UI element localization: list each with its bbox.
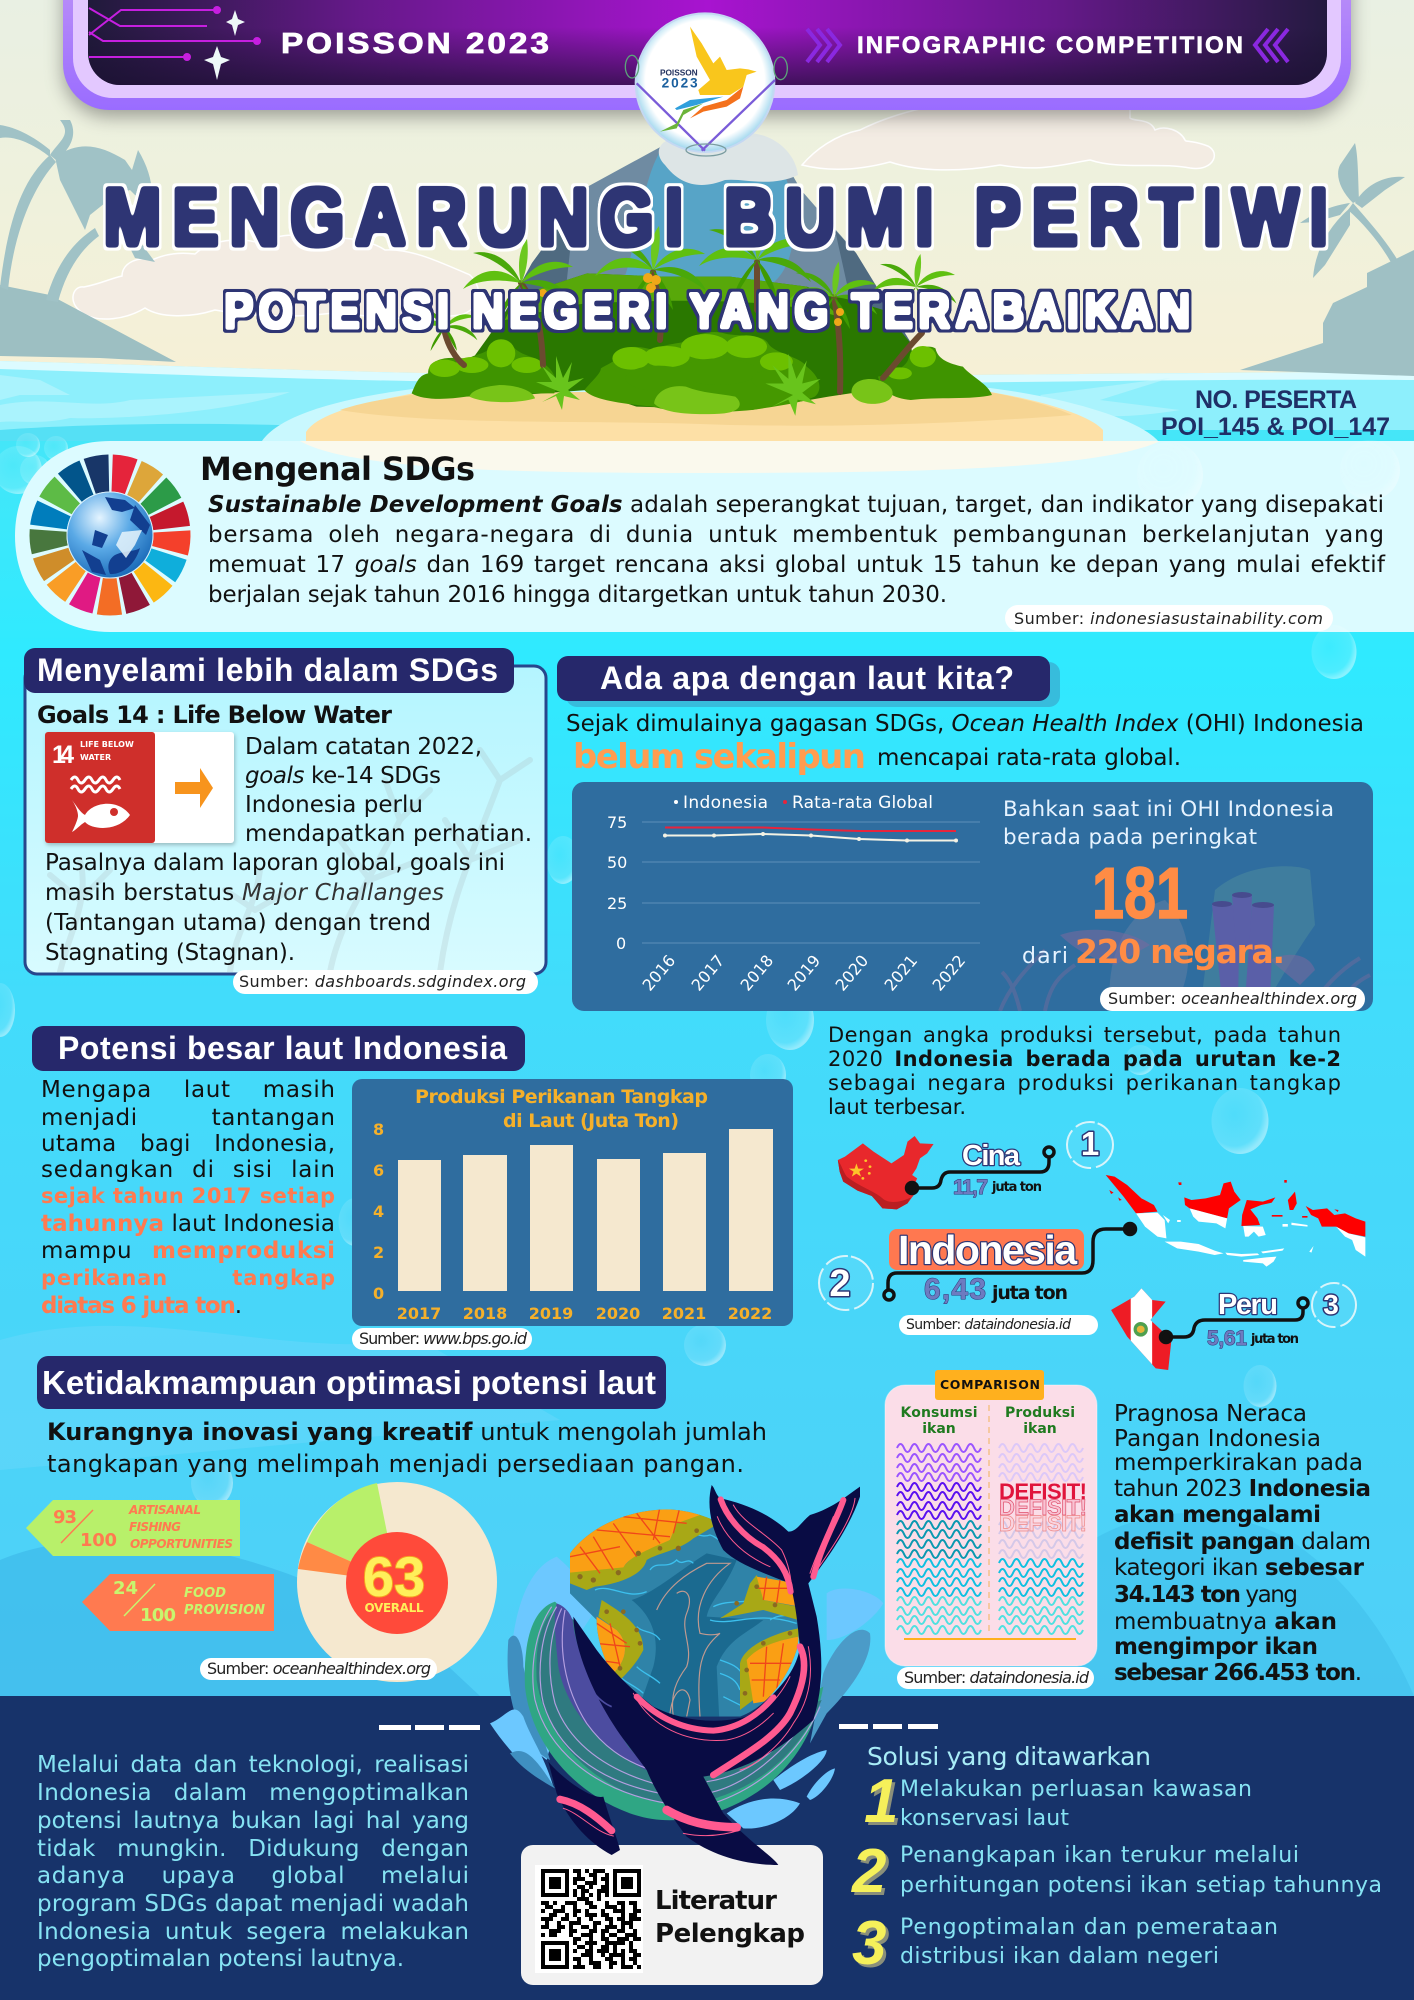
text block: intro paragraph: berjalan sejak tahun 2016 hingga ditargetkan untuk tahun 2030. — [208, 582, 947, 608]
text block: food balance: membuatnya akan — [1114, 1609, 1337, 1635]
text block: footer left: potensi lautnya bukan lagi hal yang — [37, 1808, 469, 1834]
text block: Pasalnya dalam laporan global, goals ini — [45, 850, 505, 876]
whale body — [548, 1485, 860, 1865]
solution 2 — [851, 1837, 1382, 1906]
rank badge 1 — [1067, 1122, 1113, 1168]
chevrons right — [1255, 29, 1288, 62]
sparkle icons — [204, 10, 245, 80]
participant number: POI_145 & POI_147 — [1161, 413, 1390, 441]
legend: Indonesia — [683, 793, 768, 813]
connector — [1160, 1298, 1308, 1342]
line chart: 2016 — [639, 951, 679, 995]
text block: utama bagi Indonesia, — [41, 1131, 335, 1157]
icon: SDG 14 tile — [45, 732, 234, 843]
text block: rank intro: laut terbesar. — [828, 1095, 966, 1119]
icon: Peru map — [1111, 1288, 1172, 1370]
coconuts — [539, 273, 844, 326]
production waves — [999, 1444, 1083, 1634]
icon: globe — [67, 492, 153, 578]
center bush — [584, 332, 819, 412]
tag: artisanal fishing: 100 — [80, 1530, 117, 1551]
source pill: Sumber: indonesiasustainability.com — [1014, 609, 1323, 628]
source pill: Sumber: www.bps.go.id — [359, 1329, 528, 1348]
coral decoration — [1000, 866, 1370, 1011]
source pill — [899, 1315, 1098, 1335]
bubbles left of intro — [0, 433, 68, 494]
text block: perikanan tangkap — [41, 1266, 335, 1290]
text block: food balance: memperkirakan pada — [1114, 1450, 1363, 1476]
panel: Menyelami lebih dalam SDGs — [24, 648, 546, 994]
source pill — [1005, 605, 1333, 631]
label pill: Indonesia — [898, 1227, 1078, 1273]
text block: food balance: mengimpor ikan — [1114, 1634, 1318, 1660]
text block: footer left: adanya upaya global melalui — [37, 1863, 469, 1889]
label: Cina — [962, 1140, 1021, 1172]
bar chart: 2022 — [728, 1304, 772, 1323]
text block: rank intro — [828, 1023, 1341, 1119]
circuit lines — [89, 6, 261, 61]
icon: SDG 14 tile: 14 — [52, 741, 74, 769]
bar chart — [352, 1079, 793, 1326]
chart: OHI score donut: OVERALL — [364, 1601, 424, 1615]
text block: mendapatkan perhatian. — [245, 821, 532, 847]
decorative dashes left and right — [379, 1724, 938, 1730]
solution 1: konservasi laut — [900, 1806, 1069, 1831]
rank callout: dari — [1022, 944, 1068, 969]
text block: footer left: Indonesia dalam mengoptimalkan — [37, 1780, 469, 1806]
deficit label: DEFISIT! — [999, 1511, 1087, 1536]
text block: food balance: akan mengalami — [1114, 1502, 1321, 1528]
panel: Ketidakmampuan optimasi potensi laut — [26, 1356, 767, 1682]
value: 11,7 — [953, 1176, 988, 1199]
heading: Mengenal SDGs: Mengenal SDGs — [200, 450, 475, 488]
water splashes — [490, 1557, 883, 1829]
foliage: bushes in island coordinates — [412, 273, 992, 414]
grass tufts — [536, 354, 821, 416]
bar chart: 2017 — [397, 1304, 441, 1323]
text block: intro paragraph — [208, 492, 1386, 608]
line chart: 75 — [607, 813, 627, 832]
rank callout: 220 negara. — [1075, 932, 1285, 971]
label — [655, 1886, 805, 1949]
intro panel: Mengenal SDGs — [15, 440, 1414, 632]
text block: (Tantangan utama) dengan trend — [45, 910, 431, 936]
text block: belum sekalipun — [573, 737, 866, 777]
text block: Kurangnya inovasi yang kreatif untuk mengolah jumlah — [47, 1418, 767, 1446]
heading pill: Ada apa dengan laut kita? — [600, 660, 1014, 696]
whale belly — [525, 1602, 823, 1820]
tag: food provision: 100 — [140, 1605, 176, 1626]
value: juta ton — [991, 1180, 1042, 1195]
text block: mampu memproduksi — [41, 1238, 335, 1264]
text block: rank intro: sebagai negara produksi perikanan tangkap — [828, 1071, 1341, 1095]
logo: Poisson 2023: 2023 — [662, 75, 698, 90]
panel: Potensi besar laut Indonesia — [32, 1026, 793, 1350]
icon: China map — [838, 1136, 934, 1209]
comparison card: COMPARISON — [940, 1377, 1040, 1392]
value — [1207, 1327, 1299, 1350]
line chart: 25 — [607, 894, 627, 913]
background: left mountain and palms — [0, 120, 176, 362]
column headers: Produksi — [1005, 1405, 1075, 1421]
bar chart: 2020 — [596, 1304, 640, 1323]
background: bubbles and sea shapes — [0, 625, 1414, 1696]
line chart: 2022 — [929, 951, 969, 995]
text block: mencapai rata-rata global. — [877, 745, 1181, 771]
bird — [690, 27, 757, 95]
header banner — [63, 0, 1351, 110]
source pill: Sumber: dataindonesia.id — [904, 1668, 1090, 1687]
text block: Stagnating (Stagnan). — [45, 940, 295, 966]
line chart: 2018 — [737, 951, 777, 995]
text block: goals ke-14 SDGs — [245, 763, 441, 789]
text block: tahunnya laut Indonesia — [41, 1211, 335, 1237]
subtitle: POTENSI NEGERI YANG TERABAIKAN — [224, 282, 1190, 339]
line chart: 2020 — [832, 951, 872, 995]
bar chart: di Laut (Juta Ton) — [503, 1110, 679, 1132]
QR code — [535, 1865, 643, 1973]
background: right mountain and palm — [1240, 143, 1414, 376]
deficit label — [999, 1479, 1087, 1536]
bubbles on intro — [1137, 440, 1400, 508]
coral decoration — [50, 750, 530, 972]
sand rings — [262, 388, 1158, 441]
text block — [47, 1418, 767, 1478]
line chart: 2017 — [688, 951, 728, 995]
palm crowns — [430, 226, 956, 351]
text block: footer left — [37, 1752, 469, 1972]
deficit label: DEFISIT! — [999, 1479, 1087, 1504]
text block: sedangkan di sisi lain — [41, 1157, 335, 1183]
text block: footer left: Indonesia untuk segera melakukan — [37, 1919, 469, 1945]
text block: food balance: Pangan Indonesia — [1114, 1426, 1321, 1452]
rank badge 1: 1 — [1081, 1125, 1099, 1162]
heading pill: Menyelami lebih dalam SDGs — [37, 652, 498, 688]
icon: Indonesia map — [1106, 1175, 1365, 1267]
text block: Dalam catatan 2022, — [245, 734, 482, 760]
whale stripes — [560, 1498, 855, 1836]
text block: Sejak dimulainya gagasan SDGs, Ocean Health Index (OHI) Indonesia — [566, 711, 1364, 737]
source pill: Sumber: oceanhealthindex.org — [1108, 989, 1357, 1008]
legend: Rata-rata Global — [792, 793, 933, 813]
subheading: Goals 14 : Life Below Water — [37, 701, 392, 729]
text block: intro paragraph: memuat 17 goals dan 169 target rencana aksi global untuk 15 tahun ke depan yang mulai efektif — [208, 552, 1386, 578]
rank badge 3 — [1312, 1283, 1356, 1327]
column headers: Konsumsi — [900, 1405, 978, 1421]
bar chart: 8 — [373, 1120, 384, 1139]
value — [924, 1273, 1068, 1306]
bar chart: 2018 — [463, 1304, 507, 1323]
source pill: Sumber: dataindonesia.id — [906, 1317, 1071, 1333]
rank badge 2 — [819, 1256, 873, 1310]
bar chart: 0 — [373, 1284, 384, 1303]
ranking: Indonesia — [819, 1175, 1365, 1335]
bar chart: 6 — [373, 1161, 384, 1180]
line chart: 50 — [607, 853, 627, 872]
text block: Indonesia perlu — [245, 792, 423, 818]
text block: food balance: kategori ikan sebesar — [1114, 1555, 1365, 1581]
rank badge 3: 3 — [1323, 1289, 1339, 1320]
QR card: Literatur Pelengkap — [521, 1845, 823, 1985]
text block: menjadi tantangan — [41, 1105, 335, 1131]
chart panel — [572, 782, 1373, 1011]
legend — [674, 793, 933, 813]
text block: intro paragraph: bersama oleh negara-negara di dunia untuk membentuk pembangunan berkelanjutan yang — [208, 522, 1384, 548]
tag: food provision — [82, 1574, 274, 1631]
small bushes — [469, 379, 893, 414]
line chart: 0 — [616, 934, 626, 953]
heading: Solusi yang ditawarkan — [867, 1742, 1151, 1771]
text block — [41, 1077, 335, 1319]
text block: footer left: program SDGs dapat menjadi wadah — [37, 1891, 469, 1917]
text block: food balance: sebesar 266.453 ton. — [1114, 1660, 1362, 1686]
text block: rank intro: Dengan angka produksi tersebut, pada tahun — [828, 1023, 1341, 1047]
text block: intro paragraph: Sustainable Development Goals adalah seperangkat tujuan, target, dan indikator yang disepakati — [208, 492, 1384, 518]
solution 2: perhitungan potensi ikan setiap tahunnya — [900, 1873, 1382, 1898]
solution 3: Pengoptimalan dan pemerataan — [900, 1915, 1278, 1940]
ribbons — [625, 55, 787, 156]
text block: food balance: defisit pangan dalam — [1114, 1529, 1371, 1555]
heading pill: Ketidakmampuan optimasi potensi laut — [42, 1364, 656, 1401]
solution 1 — [864, 1767, 1252, 1836]
illustration: whale and globe — [490, 1485, 883, 1865]
footer band — [0, 1696, 1414, 2000]
solution 3 — [852, 1909, 1278, 1978]
participant number — [1161, 386, 1390, 441]
rank badge 2: 2 — [829, 1263, 851, 1305]
bar chart: 4 — [373, 1202, 384, 1221]
heading pill — [37, 1356, 666, 1409]
solution 2: 2 — [851, 1837, 886, 1906]
connector — [906, 1147, 1054, 1194]
text block: footer left: tidak mungkin. Didukung dengan — [37, 1836, 469, 1862]
rank callout: berada pada peringkat — [1003, 825, 1257, 850]
ranking: Cina — [838, 1122, 1113, 1209]
tag: artisanal fishing — [26, 1500, 240, 1556]
deficit label: DEFISIT! — [999, 1495, 1087, 1520]
participant number: NO. PESERTA — [1195, 386, 1357, 414]
text block: footer left: Melalui data dan teknologi, realisasi — [37, 1752, 469, 1778]
text block: tangkapan yang melimpah menjadi persediaan pangan. — [47, 1450, 744, 1478]
column headers: ikan — [1023, 1421, 1057, 1437]
left bush — [412, 339, 556, 399]
tag: food provision: FOOD — [184, 1586, 226, 1601]
label: Peru — [1218, 1289, 1278, 1321]
comparison card — [885, 1370, 1097, 1666]
bar chart: 2 — [373, 1243, 384, 1262]
icon: SDG 14 tile: WATER — [80, 753, 111, 762]
value: juta ton — [991, 1282, 1068, 1304]
tag: food provision: PROVISION — [184, 1603, 265, 1618]
solution 1: Melakukan perluasan kawasan — [900, 1777, 1252, 1802]
heading pill — [557, 656, 1060, 707]
right bush — [878, 347, 992, 400]
value: juta ton — [1250, 1332, 1299, 1347]
solution 3: 3 — [852, 1909, 886, 1978]
logo wordmark: POISSON — [660, 67, 698, 77]
source pill: Sumber: dashboards.sdgindex.org — [239, 972, 526, 991]
text block: Mengapa laut masih — [41, 1077, 335, 1103]
solution 3: distribusi ikan dalam negeri — [900, 1944, 1219, 1969]
title: MENGARUNGI BUMI PERTIWI — [103, 172, 1329, 263]
chart: OHI score donut: 63 — [363, 1545, 425, 1608]
panel: Ada apa dengan laut kita — [557, 656, 1373, 1011]
solution 2: Penangkapan ikan terukur melalui — [900, 1843, 1299, 1868]
tag: artisanal fishing: FISHING — [129, 1520, 181, 1534]
consumption waves — [897, 1444, 981, 1634]
connector — [884, 1224, 1136, 1300]
globe — [570, 1509, 799, 1717]
tag: food provision: 24 — [113, 1578, 138, 1599]
solution 1: 1 — [864, 1767, 898, 1836]
banner label left: POISSON 2023 — [281, 27, 549, 59]
source pill: Sumber: oceanhealthindex.org — [207, 1659, 431, 1678]
text block — [566, 711, 1364, 777]
background: clouds — [73, 100, 1214, 319]
line chart: 2019 — [784, 951, 824, 995]
palm trunks — [445, 262, 922, 392]
banner label right: INFOGRAPHIC COMPETITION — [857, 32, 1243, 59]
ranking: Peru — [1106, 1283, 1356, 1373]
text block: diatas 6 juta ton. — [41, 1293, 242, 1319]
text block: sejak tahun 2017 setiap — [41, 1184, 335, 1208]
value — [953, 1176, 1042, 1199]
label: Pelengkap — [655, 1919, 805, 1949]
logo: Poisson 2023 — [625, 13, 787, 156]
icon: SDG 14 tile: LIFE BELOW — [80, 740, 134, 749]
bar chart: Produksi Perikanan Tangkap — [415, 1086, 708, 1108]
text block — [45, 734, 532, 966]
dark foliage — [469, 273, 916, 410]
text block: footer left: pengoptimalan potensi lautnya. — [37, 1946, 404, 1972]
rank callout: 181 — [1092, 853, 1188, 933]
chart: OHI score donut — [297, 1482, 497, 1682]
sand — [306, 392, 1103, 441]
text block: food balance: tahun 2023 Indonesia — [1114, 1476, 1371, 1502]
heading pill: Potensi besar laut Indonesia — [58, 1030, 507, 1066]
text block: food balance: Pragnosa Neraca — [1114, 1401, 1307, 1427]
value: 6,43 — [924, 1273, 986, 1306]
tag: artisanal fishing: OPPORTUNITIES — [130, 1537, 233, 1551]
bar chart: 2019 — [529, 1304, 573, 1323]
island illustration — [262, 133, 1158, 441]
value: 5,61 — [1207, 1327, 1247, 1350]
column headers: ikan — [922, 1421, 956, 1437]
column headers — [900, 1405, 1075, 1437]
label: Literatur — [655, 1886, 777, 1916]
solutions list — [851, 1742, 1382, 1978]
text block: rank intro: 2020 Indonesia berada pada urutan ke-2 — [828, 1047, 1341, 1071]
tag: artisanal fishing: 93 — [53, 1507, 77, 1528]
text block: food balance — [1114, 1401, 1371, 1686]
bar chart: 2021 — [662, 1304, 706, 1323]
line chart: 2021 — [881, 951, 921, 995]
volcano — [488, 133, 911, 343]
rank callout: Bahkan saat ini OHI Indonesia — [1003, 797, 1334, 822]
chevrons left — [807, 29, 840, 62]
line chart — [607, 793, 980, 995]
tag: artisanal fishing: ARTISANAL — [128, 1503, 201, 1517]
icon: SDG wheel — [22, 447, 198, 623]
rank callout — [1003, 797, 1334, 971]
text block: masih berstatus Major Challanges — [45, 880, 444, 906]
text block: food balance: 34.143 ton yang — [1114, 1582, 1298, 1608]
